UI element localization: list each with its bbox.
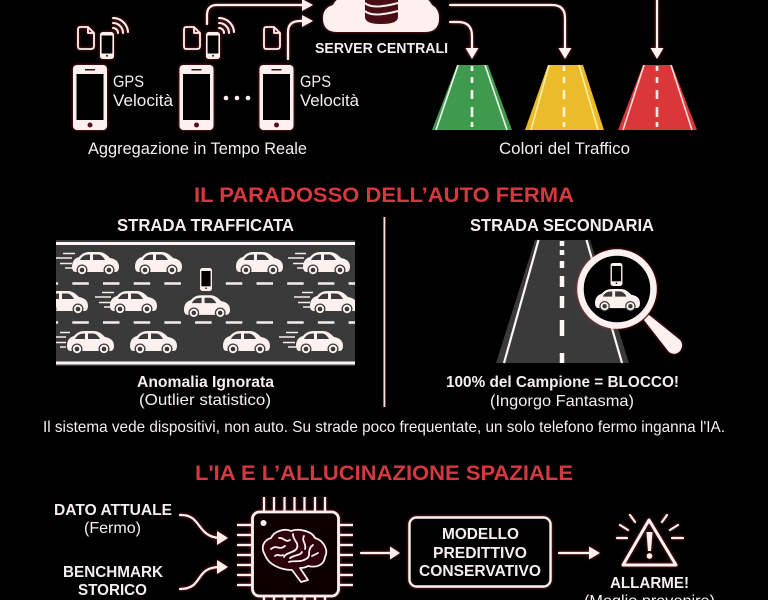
label: GPS speed left: Velocità bbox=[113, 91, 174, 110]
road illustration bbox=[496, 240, 629, 363]
icon: warning triangle bbox=[617, 515, 683, 565]
label: GPS speed right: GPS bbox=[300, 72, 331, 91]
input: current data: DATO ATTUALE bbox=[54, 502, 172, 519]
label: ignored anomaly: Anomalia Ignorata bbox=[137, 374, 274, 391]
arrow: to red bbox=[650, 0, 664, 59]
label: GPS speed left bbox=[113, 72, 174, 110]
icon: small phone 2 bbox=[207, 33, 219, 58]
icon: green road bbox=[432, 65, 512, 130]
icon: phone on stopped car bbox=[201, 269, 211, 290]
caption: aggregation: Aggregazione in Tempo Reale bbox=[88, 139, 307, 158]
icon: yellow road bbox=[525, 65, 604, 130]
icon: signal 2 bbox=[219, 18, 234, 33]
arrow: model to alarm bbox=[559, 546, 600, 560]
heading: busy road: STRADA TRAFFICATA bbox=[117, 215, 294, 235]
icon: document 2 bbox=[184, 27, 200, 49]
caption: traffic colours: Colori del Traffico bbox=[499, 139, 630, 158]
icon: AI chip with brain bbox=[237, 497, 353, 600]
panel: secondary road bbox=[446, 215, 682, 410]
heading: AI hallucination: L'IA E L’ALLUCINAZIONE SPAZIALE bbox=[195, 462, 573, 485]
icon: phone B bbox=[180, 65, 214, 130]
icon: document 1 bbox=[78, 27, 94, 49]
panel: traffic colours bbox=[432, 0, 697, 158]
label: phantom jam: (Ingorgo Fantasma) bbox=[490, 393, 634, 410]
explanation text: Il sistema vede dispositivi, non auto. Su strade poco frequentate, un solo telefono fermo inganna l'IA. bbox=[43, 419, 725, 436]
input: historical benchmark: BENCHMARK bbox=[63, 564, 163, 581]
cars row 2 bbox=[41, 291, 357, 318]
label: 100 percent of sample: 100% del Campione = BLOCCO! bbox=[446, 374, 679, 391]
panel: real-time aggregation bbox=[73, 0, 360, 158]
panel: busy road bbox=[41, 215, 357, 409]
icon: cloud with database bbox=[323, 0, 439, 32]
label: GPS speed left: GPS bbox=[113, 72, 144, 91]
input: current data: (Fermo) bbox=[84, 520, 141, 537]
icon: magnifier with car and phone bbox=[580, 252, 682, 354]
icon: red road bbox=[618, 65, 697, 130]
label: alarm: ALLARME! bbox=[610, 575, 689, 592]
arrow: to green bbox=[450, 22, 478, 59]
input: historical benchmark bbox=[63, 564, 163, 599]
arrow: to yellow bbox=[450, 5, 572, 59]
icon: signal 1 bbox=[113, 18, 128, 33]
arrow: phone uplink left bbox=[99, 0, 101, 24]
box: conservative model: CONSERVATIVO bbox=[419, 563, 541, 580]
icon: brain bbox=[263, 530, 326, 582]
heading: secondary road: STRADA SECONDARIA bbox=[470, 215, 654, 235]
arrow: current data to chip bbox=[180, 515, 228, 545]
panel: AI pipeline bbox=[54, 497, 715, 600]
label: GPS speed right: Velocità bbox=[300, 91, 360, 110]
speed lines bbox=[56, 254, 313, 347]
label: statistical outlier: (Outlier statistico) bbox=[139, 392, 271, 409]
icon: phone C bbox=[260, 65, 294, 130]
input: historical benchmark: STORICO bbox=[78, 582, 147, 599]
heading: stopped car paradox: IL PARADOSSO DELL’AUTO FERMA bbox=[194, 184, 574, 207]
ellipsis dots bbox=[224, 96, 250, 100]
divider bbox=[384, 217, 385, 407]
icon: small phone 1 bbox=[101, 33, 113, 58]
icon: phone A bbox=[73, 65, 107, 130]
arrow: benchmark to chip bbox=[180, 560, 228, 589]
box: conservative model bbox=[410, 518, 550, 586]
cars row 1 bbox=[72, 252, 350, 276]
arrow: chip to model bbox=[361, 546, 400, 560]
label: GPS speed right bbox=[300, 72, 360, 110]
label: central servers: SERVER CENTRALI bbox=[315, 41, 448, 57]
road illustration bbox=[41, 240, 357, 366]
box: conservative model: MODELLO bbox=[442, 526, 519, 543]
icon: document 3 bbox=[264, 27, 280, 49]
box: conservative model: PREDITTIVO bbox=[433, 545, 527, 562]
panel: central servers bbox=[315, 0, 448, 57]
arrow: top to server bbox=[207, 0, 313, 24]
cars row 3 bbox=[67, 331, 343, 354]
arrow: lower to server bbox=[288, 15, 313, 59]
input: current data bbox=[54, 502, 172, 537]
